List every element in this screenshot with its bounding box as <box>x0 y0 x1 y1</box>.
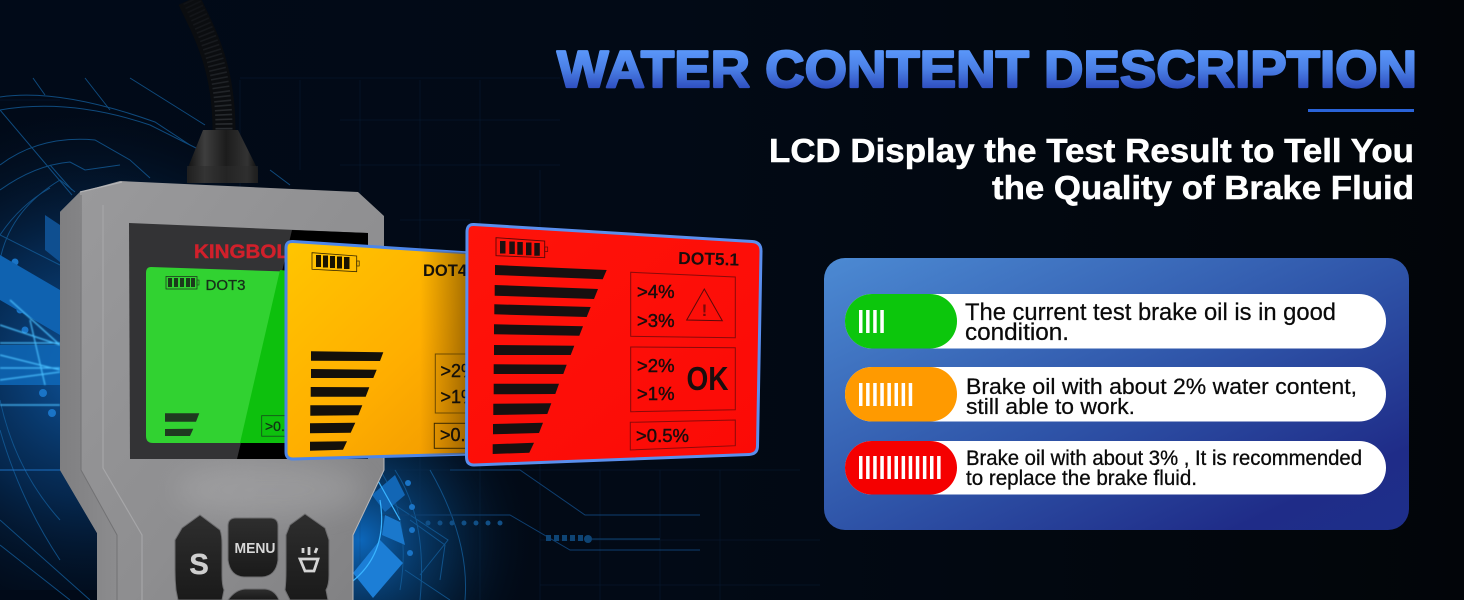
label: DOT5.1: DOT5.1 <box>678 248 740 270</box>
title underline <box>1308 109 1414 112</box>
row: good condition: condition. <box>965 319 1069 346</box>
warning box: >4% <box>637 281 675 302</box>
warning box: >3% <box>637 310 675 331</box>
LCD: DOT3 green <box>146 267 300 443</box>
reading box: >0. <box>265 418 285 434</box>
warning box <box>631 272 735 338</box>
subtitle: LCD Display the Test Result to Tell You <box>769 132 1414 169</box>
device: handheld body <box>60 181 384 600</box>
LCD card: DOT5.1 red <box>466 224 761 465</box>
OK box: >1% <box>637 383 675 404</box>
OK box <box>631 347 735 412</box>
key: light <box>285 514 329 600</box>
battery icon <box>312 253 359 272</box>
row: about 3% water: to replace the brake fluid. <box>966 467 1197 490</box>
reading boxes: >0.5% <box>440 425 492 445</box>
reading box <box>262 416 292 436</box>
key: MENU: MENU <box>234 541 276 557</box>
row: good condition <box>845 294 1386 348</box>
glowing data lines <box>0 300 60 405</box>
label: DOT3: DOT3 <box>206 277 246 294</box>
label: DOT4: DOT4 <box>423 262 468 280</box>
title: WATER CONTENT DESCRIPTION <box>557 41 1417 99</box>
OK box: >2% <box>637 355 675 376</box>
row: about 2% water: Brake oil with about 2% water content, <box>966 374 1357 399</box>
row: good condition: The current test brake oil is in good <box>965 299 1336 326</box>
row: about 3% water <box>845 441 1386 494</box>
key: MENU <box>228 518 278 577</box>
subtitle <box>769 132 1414 206</box>
panel: water content legend <box>824 258 1409 530</box>
device: cable collar <box>187 130 258 183</box>
reading boxes: >1% <box>440 387 477 407</box>
battery icon <box>166 276 199 289</box>
blue segment shapes <box>0 215 405 598</box>
circuit ring decoration <box>0 78 700 600</box>
reading boxes: >2% <box>440 361 477 381</box>
pixel-block trace <box>546 535 660 543</box>
key: lower <box>228 589 279 600</box>
device: keypad <box>175 514 329 600</box>
row: about 2% water: still able to work. <box>966 394 1135 419</box>
level bars <box>165 413 199 436</box>
level bars <box>310 351 383 451</box>
dot chain <box>12 258 415 556</box>
logo: KINGBOLEN: KINGBOL <box>194 241 289 263</box>
row: about 3% water: Brake oil with about 3% , It is recommended <box>966 447 1362 470</box>
key: S: S <box>189 549 209 581</box>
warning box: ! <box>702 301 707 320</box>
key: S <box>175 515 224 600</box>
minimum box: >0.5% <box>636 425 689 446</box>
subtitle: the Quality of Brake Fluid <box>992 169 1414 206</box>
level bars <box>493 265 607 454</box>
LCD card: DOT4 orange <box>286 241 492 459</box>
row: about 2% water <box>845 367 1386 422</box>
device: screen bezel <box>129 223 368 459</box>
minimum box <box>630 420 735 450</box>
icon: lamp <box>300 547 318 571</box>
device: tester cable <box>189 0 224 130</box>
battery icon <box>496 238 548 258</box>
OK box: OK <box>686 360 729 397</box>
reading boxes <box>434 354 492 448</box>
